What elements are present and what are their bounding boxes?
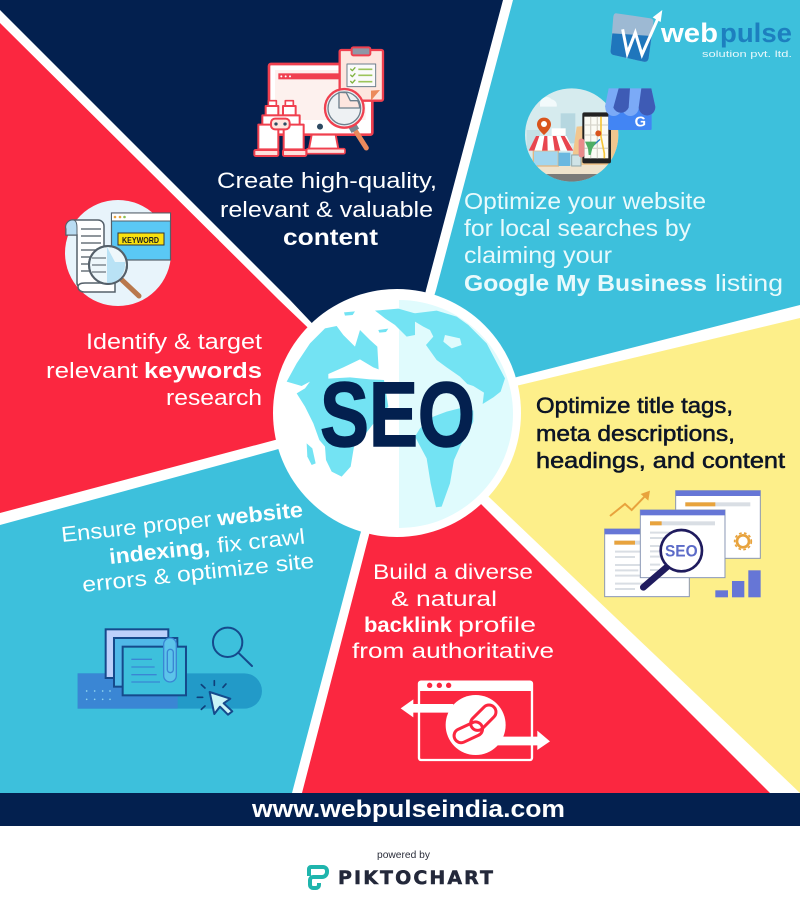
icon: backlink browser <box>401 682 550 760</box>
SEO heading: SEO <box>320 364 475 466</box>
text: backlinks: & natural <box>391 587 497 611</box>
text: create high-quality content <box>217 168 437 250</box>
panel: backlinks <box>302 413 770 793</box>
icon: google my business: G <box>635 114 646 130</box>
text: indexing: website <box>215 498 304 531</box>
text: create high-quality content: relevant & valuable <box>220 197 433 222</box>
panel shape: local search <box>397 0 800 413</box>
text: local search <box>464 188 783 296</box>
logo: webpulse <box>611 10 792 62</box>
text: local search: claiming your <box>464 242 612 268</box>
text: indexing: fix crawl <box>216 525 306 558</box>
icon: indexing documents <box>78 628 262 715</box>
text: title tags: headings, and content <box>536 448 785 473</box>
panel shape: indexing <box>0 413 397 793</box>
icon: keyword research <box>65 200 171 306</box>
text: backlinks: backlink <box>364 613 452 637</box>
text: local search: Google My Business <box>464 270 707 296</box>
panel: content <box>0 0 503 413</box>
globe continents <box>287 309 505 507</box>
icon: monitor, clipboard and binoculars <box>254 47 383 156</box>
icon: SEO pages <box>605 491 761 597</box>
text: keywords: research <box>166 385 262 410</box>
panel: indexing <box>0 413 397 793</box>
website url: www.webpulseindia.com <box>251 796 565 823</box>
text: local search: listing <box>715 270 783 296</box>
text: title tags: Optimize title tags, <box>536 393 733 418</box>
powered by piktochart <box>309 849 493 889</box>
globe right half <box>399 300 513 528</box>
text: title tags <box>536 393 785 473</box>
logo: webpulse: web <box>660 18 718 48</box>
text: indexing: Ensure proper <box>60 507 213 547</box>
logo: webpulse: solution pvt. ltd. <box>702 49 792 60</box>
text: create high-quality content: Create high-quality, <box>217 168 437 193</box>
label: KEYWORD: KEYWORD <box>122 235 159 245</box>
text: backlinks: profile <box>458 613 536 637</box>
text: indexing: indexing, <box>108 535 211 569</box>
logo: webpulse: pulse <box>720 18 792 48</box>
center globe with SEO <box>273 289 521 537</box>
text: keywords: relevant <box>46 358 138 383</box>
text: backlinks: from authoritative <box>352 639 554 663</box>
icon: google my business <box>523 87 655 183</box>
panel shape: content <box>0 0 503 413</box>
globe white ring <box>273 289 521 537</box>
text: keywords <box>46 329 262 410</box>
text: title tags: meta descriptions, <box>536 421 735 446</box>
panel: local search <box>434 0 800 378</box>
panel shape: backlinks <box>302 413 770 793</box>
panel shape: on-page optimization <box>397 318 800 793</box>
text: local search: for local searches by <box>464 215 692 241</box>
text: backlinks: Build a diverse <box>373 560 533 584</box>
text: local search: Optimize your website <box>464 188 706 214</box>
piktochart wordmark: PIKTOCHART <box>338 867 493 889</box>
piktochart mark <box>309 867 327 888</box>
panel: on-page optimization <box>397 318 800 793</box>
panel shape: keywords <box>0 23 397 513</box>
text: backlinks <box>352 560 554 663</box>
powered by label: powered by <box>377 849 431 861</box>
icon: SEO pages: SEO <box>665 542 698 561</box>
footer banner <box>0 793 800 826</box>
text: keywords: keywords <box>144 358 262 383</box>
text: indexing <box>60 498 315 597</box>
banner bar <box>0 793 800 826</box>
text: create high-quality content: content <box>283 224 378 250</box>
text: keywords: Identify & target <box>86 329 262 354</box>
logo mark <box>611 10 662 62</box>
panel: keywords <box>0 23 397 513</box>
text: indexing: errors & optimize site <box>81 549 315 597</box>
